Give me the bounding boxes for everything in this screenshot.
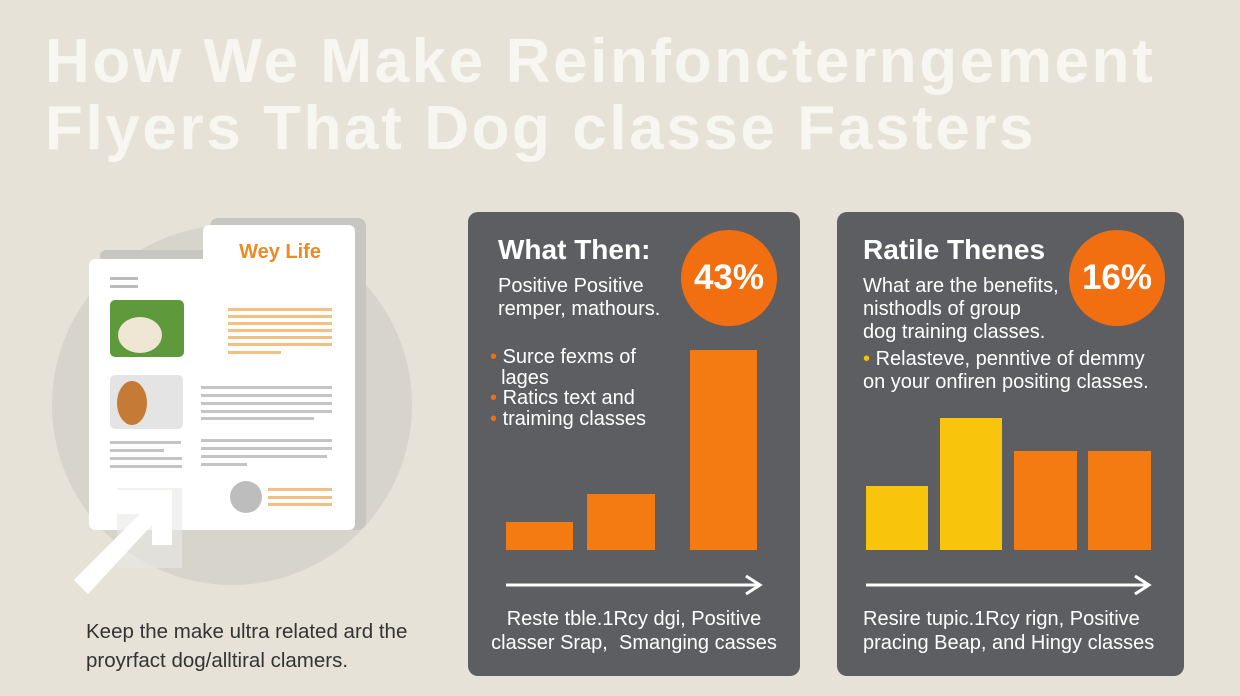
panel: what then — [468, 212, 800, 676]
badge: 16%: 16% — [1082, 258, 1152, 297]
text block: dog training classes. — [863, 321, 1045, 343]
badge: 43% — [681, 230, 777, 326]
illustration: flyer — [52, 218, 412, 594]
footer text: classer Srap, Smanging casses — [491, 632, 777, 654]
footer text — [491, 608, 777, 654]
badge: 16% — [1069, 230, 1165, 326]
bullets: • Ratics text and — [490, 387, 635, 409]
footer text: pracing Beap, and Hingy classes — [863, 632, 1154, 654]
text: left caption: Keep the make ultra related ard the — [86, 620, 407, 643]
arrow — [866, 574, 1152, 596]
bar chart — [866, 418, 1151, 550]
text block: What are the benefits, — [863, 275, 1059, 297]
badge: 43%: 43% — [694, 258, 764, 297]
bullet — [863, 348, 1149, 393]
text block: remper, mathours. — [498, 298, 660, 320]
text: left caption: proyrfact dog/alltiral clamers. — [86, 649, 348, 672]
bullets — [490, 346, 646, 430]
text: left caption — [86, 620, 407, 672]
footer text: Resire tupic.1Rcy rign, Positive — [863, 608, 1140, 630]
bullets: • Surce fexms of — [490, 346, 636, 368]
bullets: • traiming classes — [490, 408, 646, 430]
bullets: lages — [501, 366, 549, 388]
title: How We Make Reinfoncterngement — [45, 27, 1155, 96]
footer text — [863, 608, 1154, 654]
text block: Positive Positive — [498, 275, 644, 297]
text block — [863, 275, 1059, 343]
text block — [498, 275, 660, 320]
title: Flyers That Dog classe Fasters — [45, 94, 1036, 163]
bar chart — [506, 350, 757, 550]
heading: What Then: — [498, 234, 650, 265]
panel: ratile thenes — [837, 212, 1184, 676]
bullet: on your onfiren positing classes. — [863, 371, 1149, 393]
title — [45, 27, 1155, 163]
heading: Ratile Thenes — [863, 234, 1045, 265]
arrow — [506, 574, 763, 596]
illustration: flyer: Wey Life — [239, 241, 321, 263]
bullet: • Relasteve, penntive of demmy — [863, 348, 1145, 370]
footer text: Reste tble.1Rcy dgi, Positive — [507, 608, 761, 630]
text block: nisthodls of group — [863, 298, 1021, 320]
